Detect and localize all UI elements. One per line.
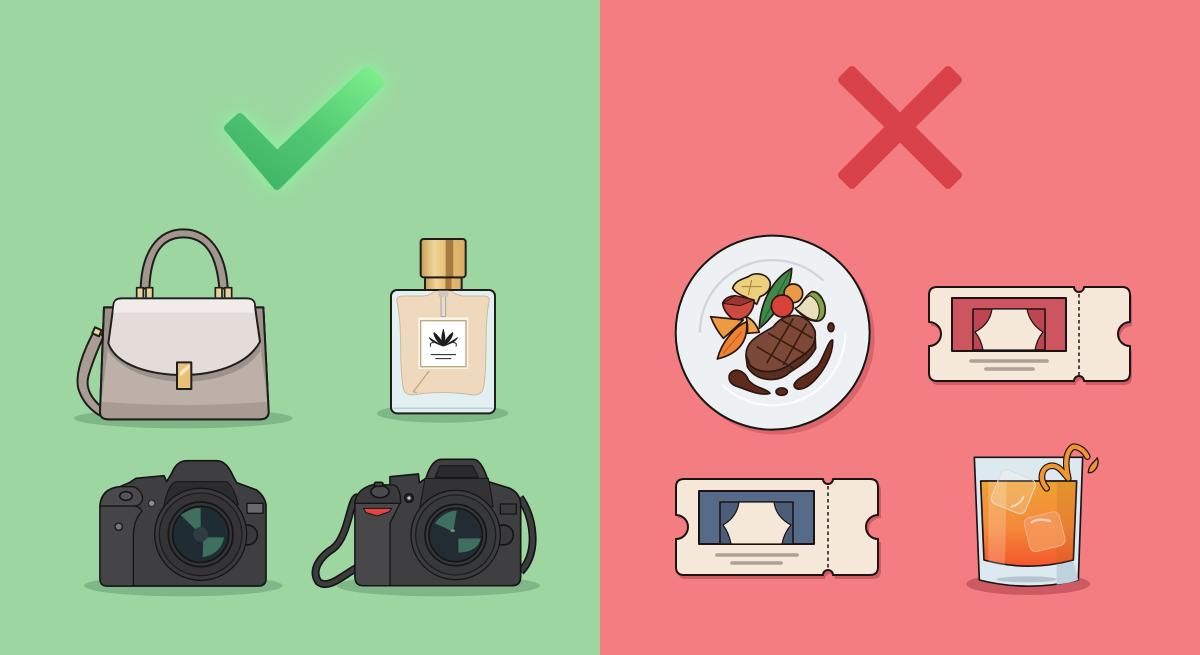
- food: roast potato: [733, 274, 770, 304]
- icon: perfume bottle: [377, 239, 508, 423]
- food: orange vegetable: [784, 284, 803, 303]
- food: red pepper: [723, 296, 754, 320]
- food: cherry tomato: [771, 295, 793, 317]
- icon: camera with strap: [316, 459, 540, 596]
- garnish: orange peel twist: [1042, 447, 1087, 488]
- icon: cocktail glass: [966, 447, 1098, 595]
- food: zucchini slice: [795, 292, 825, 321]
- food: sauce drizzle: [729, 340, 833, 394]
- icon: blue theatre ticket: [676, 479, 881, 579]
- food: sweet potato wedges: [746, 317, 759, 333]
- icon: cross mark: [842, 70, 958, 185]
- icon: red theatre ticket: [929, 287, 1132, 385]
- panel: green left side: [0, 0, 600, 655]
- icon: check mark: [228, 70, 381, 186]
- icon: handbag: [74, 229, 293, 428]
- food: leaf: [759, 268, 792, 328]
- icon: plate of steak and vegetables: [676, 236, 875, 435]
- food: grilled steak: [746, 316, 816, 380]
- icon: compact camera: [84, 461, 283, 596]
- panel: red right side: [600, 0, 1200, 655]
